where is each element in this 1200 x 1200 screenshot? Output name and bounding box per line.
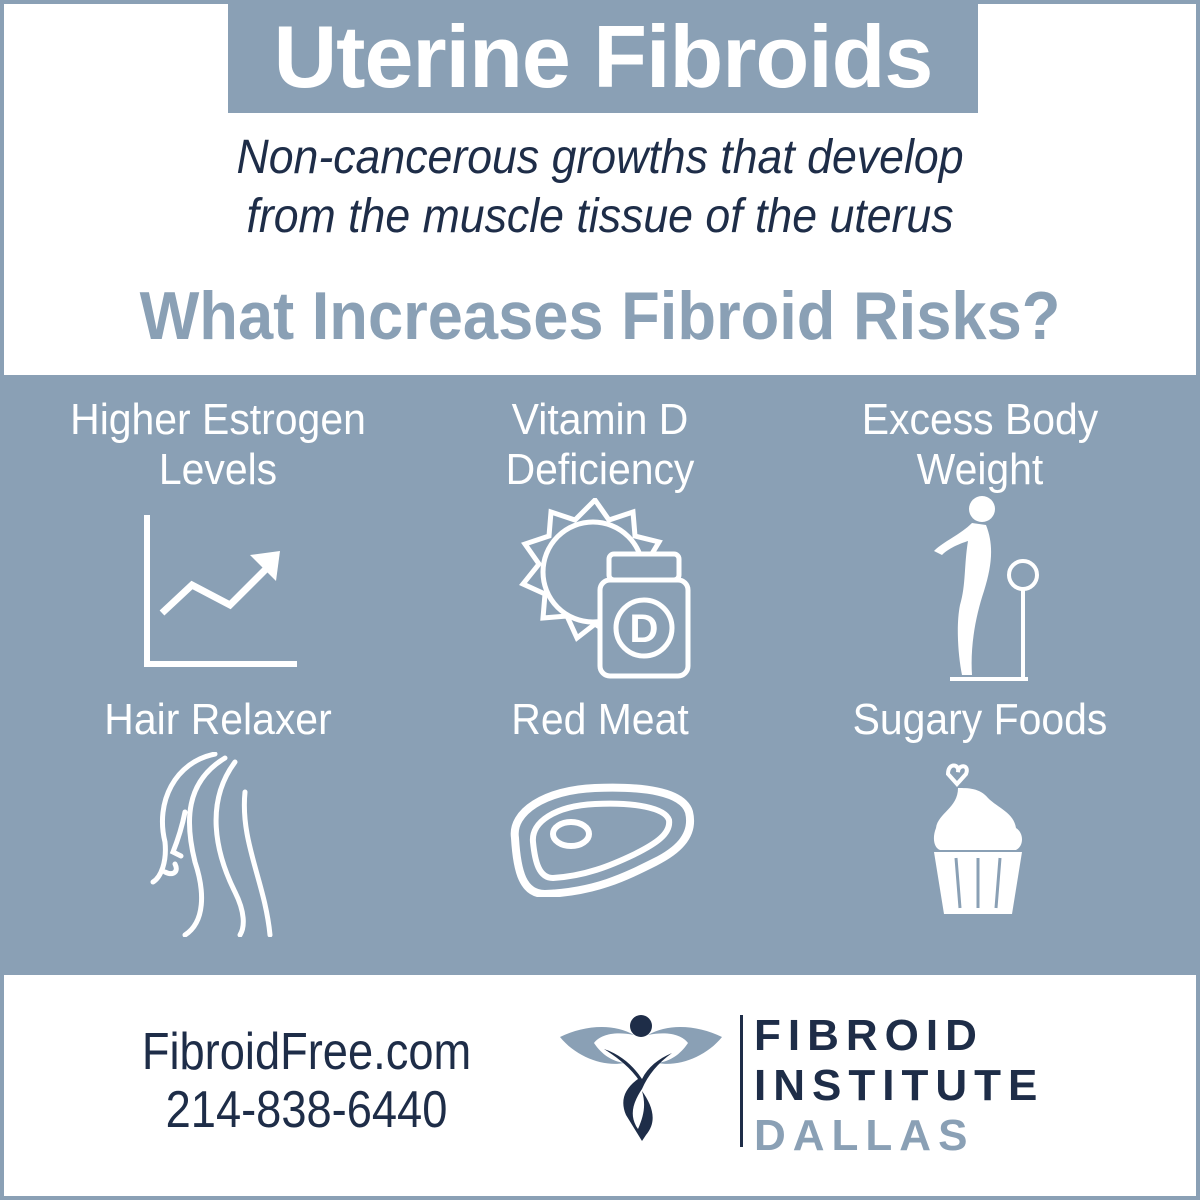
logo <box>560 1011 1044 1160</box>
logo mark <box>560 1015 722 1141</box>
label: vitamin D: Deficiency <box>506 445 694 494</box>
heading: What Increases Fibroid Risks? <box>140 278 1060 354</box>
logo text: FIBROID <box>754 1011 984 1060</box>
icon: chart <box>144 515 297 667</box>
logo divider <box>740 1015 743 1147</box>
subtitle: Non-cancerous growths that develop <box>236 131 964 184</box>
icon: sun and vitamin D bottle: D <box>630 607 658 651</box>
logo text <box>754 1011 1044 1160</box>
label: vitamin D: Vitamin D <box>512 395 688 444</box>
contact text: 214-838-6440 <box>166 1081 447 1139</box>
icon: figure on scale <box>934 496 1039 681</box>
label: hair relaxer: Hair Relaxer <box>104 695 332 744</box>
label: body weight: Excess Body <box>862 395 1098 444</box>
label: body weight <box>862 395 1098 494</box>
contact text <box>142 1023 471 1139</box>
icon: cupcake <box>934 764 1022 914</box>
label: estrogen: Levels <box>159 445 277 494</box>
icon: steak <box>510 784 694 897</box>
subtitle <box>236 131 964 243</box>
label: sugary foods: Sugary Foods <box>853 695 1107 744</box>
label: estrogen <box>70 395 366 494</box>
title bar: Uterine Fibroids <box>274 7 932 106</box>
icon: sun and vitamin D bottle <box>519 498 690 678</box>
subtitle: from the muscle tissue of the uterus <box>246 190 954 243</box>
logo text: INSTITUTE <box>754 1061 1044 1110</box>
contact text: FibroidFree.com <box>142 1023 471 1081</box>
label: body weight: Weight <box>917 445 1043 494</box>
icon: hair/face <box>150 752 272 937</box>
label: red meat: Red Meat <box>511 695 689 744</box>
label: vitamin D <box>506 395 694 494</box>
top white panel <box>4 4 1196 375</box>
footer panel <box>4 975 1196 1196</box>
logo text: DALLAS <box>754 1111 974 1160</box>
label: estrogen: Higher Estrogen <box>70 395 366 444</box>
